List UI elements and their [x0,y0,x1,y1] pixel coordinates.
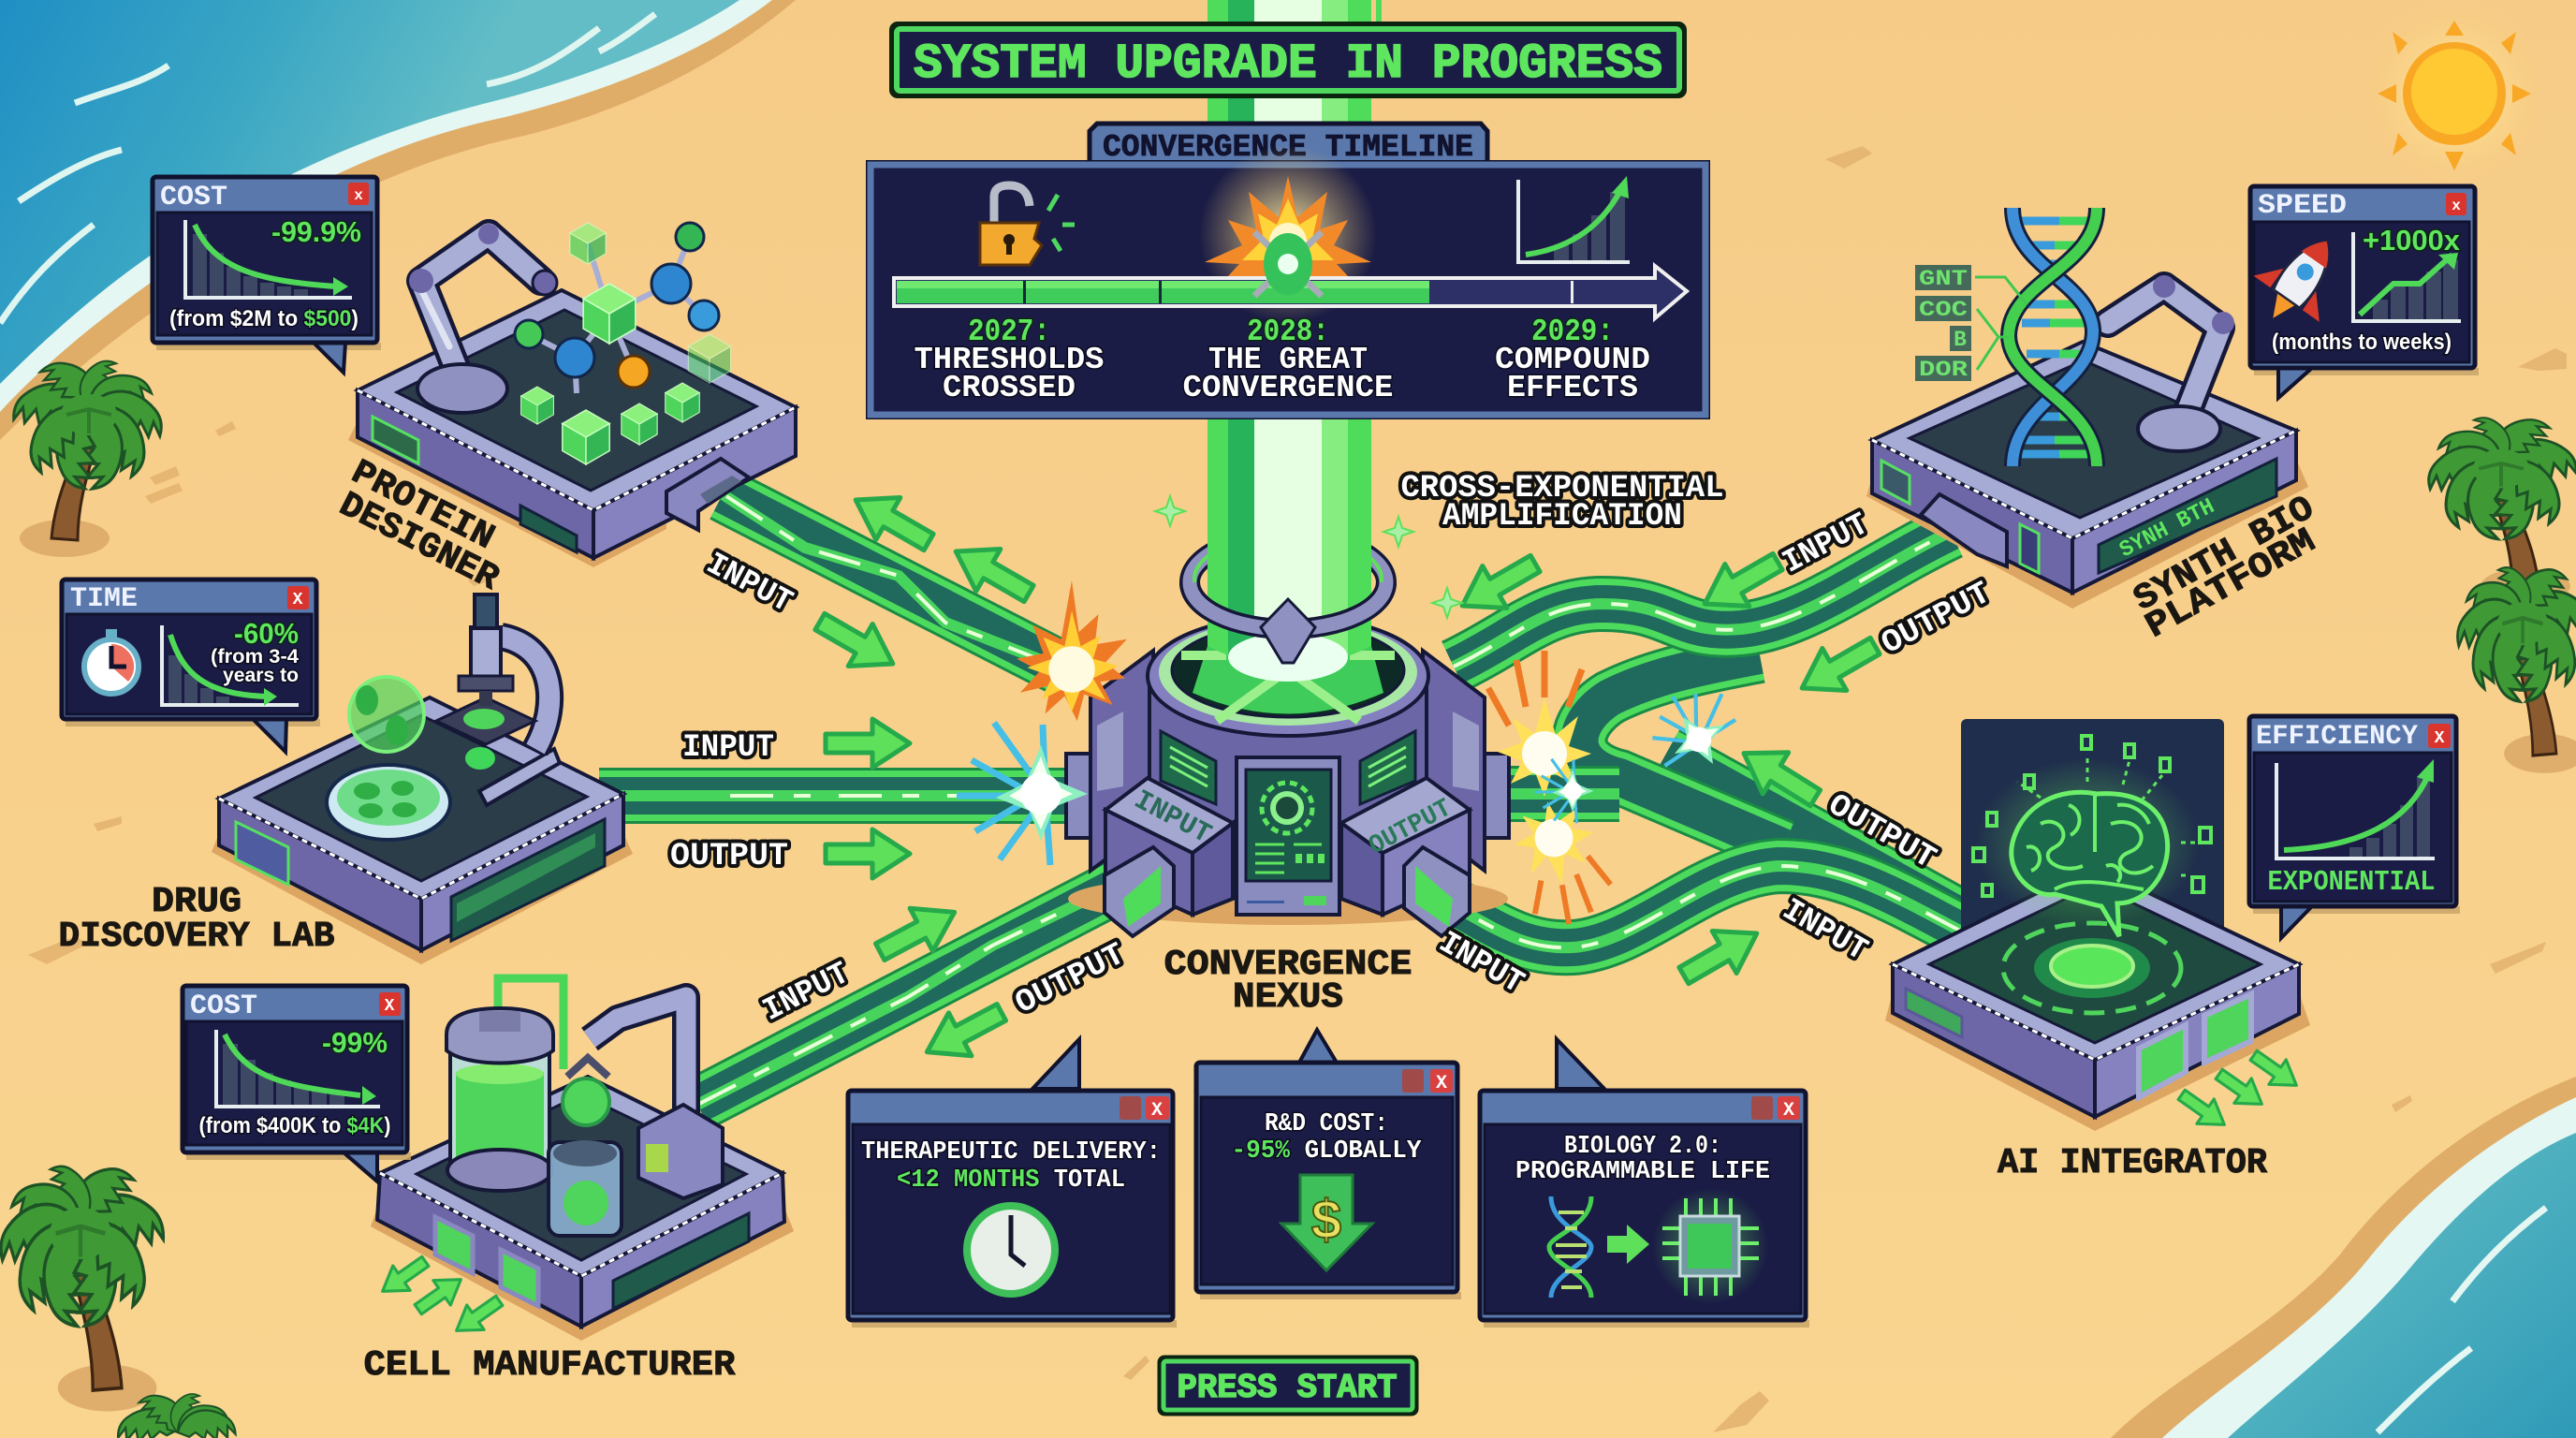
window: therapeutic delivery: <12 MONTHS TOTAL [897,1167,1125,1195]
window: biology 2.0: X [1783,1100,1794,1122]
callout: cost, protein designer: (from $2M to $500) [169,306,359,331]
callout: time, drug discovery lab: X [293,591,303,609]
collision burst: output lower [1508,794,1616,931]
milestone 2028: 2028: [1247,315,1329,349]
tube labels: INPUT [1776,893,1873,969]
beam sparkles [1155,496,1462,618]
nexus front: ring, monitor, input and output blocks: OUTPUT [1365,794,1456,861]
milestone 2028 [1183,315,1393,405]
label: convergence nexus: NEXUS [1233,977,1343,1018]
window: biology 2.0: PROGRAMMABLE LIFE [1515,1158,1770,1186]
icon: compound growth chart [1518,176,1630,262]
nexus front: ring, monitor, input and output blocks [1105,582,1470,936]
platform: drug discovery lab [212,594,633,964]
icon: rocket [2240,218,2360,341]
green flow arrows [373,478,2305,1343]
progress bar [894,232,1687,318]
platform: synth bio: DOR [1919,358,1968,382]
icon: unlocked padlock [980,185,1075,265]
icon: DNA helix [1549,1196,1591,1298]
platform: synth bio: SYNH BTH [2115,494,2219,564]
callout: cost, cell manufacturer [183,986,411,1181]
tube labels: OUTPUT [1822,788,1941,877]
timeline tab: CONVERGENCE TIMELINE [1103,130,1473,165]
milestone 2027: THRESHOLDS [914,343,1105,377]
collision burst: protein tube [1017,580,1127,721]
tube labels: OUTPUT [670,839,788,874]
panel: convergence timeline [866,124,1710,419]
milestone 2027: 2027: [968,315,1050,349]
tube labels: INPUT [1432,926,1530,1002]
callout: speed, synth bio: SPEED [2258,190,2347,222]
callout: cost, protein designer: COST [160,182,227,213]
icon: stopwatch [84,629,139,694]
platform: synth bio: GNT [1919,267,1968,291]
callout: efficiency, AI integrator [2249,716,2460,938]
window: biology 2.0: BIOLOGY 2.0: [1564,1133,1721,1161]
tube: nexus output stub [1507,766,1619,822]
milestone 2029: 2029: [1531,315,1614,349]
callout: cost, protein designer: -99.9% [271,215,361,248]
icon: clock [967,1206,1055,1294]
window: therapeutic delivery [848,1039,1177,1328]
ocean: bottom-right [2111,1077,2576,1438]
palm tree: lower left [0,1152,164,1412]
milestone 2028: CONVERGENCE [1183,371,1393,405]
collision burst: output crossing [1488,651,1591,797]
tube: protein designer to nexus [723,494,1058,667]
ocean: top-left [0,0,796,440]
icon: falling dollar arrow: $ [1310,1194,1342,1255]
tube: AI integrator to nexus [1423,866,1970,947]
tube: synth bio output branch [1580,655,1783,847]
platform: synth bio [1866,208,2308,609]
window: R&D cost: -95% GLOBALLY [1232,1137,1422,1166]
tube labels: OUTPUT [1010,937,1132,1022]
label: drug discovery lab: DISCOVERY LAB [58,917,335,957]
collision burst: right spark [1637,674,1749,785]
icon: convergence explosion [1199,145,1377,323]
label: cross-exponential amplification [1400,471,1724,535]
nexus front: ring, monitor, input and output blocks: INPUT [1128,785,1216,851]
label: cross-exponential amplification: CROSS-EXPONENTIAL [1400,471,1724,506]
arrow: DNA to chip [1607,1225,1649,1264]
callout: speed, synth bio [2240,186,2479,398]
collision burst: blue crossing [1535,759,1593,823]
callout: cost, cell manufacturer: -99% [322,1026,388,1059]
callout: efficiency, AI integrator: EXPONENTIAL [2267,866,2436,899]
tube: cell manufacturer to nexus [697,866,1156,1105]
platform: cell manufacturer [371,978,794,1341]
callout: time, drug discovery lab: (from 3-4 [211,646,299,668]
callout: efficiency, AI integrator: EFFICIENCY [2256,721,2418,753]
palm tree: bottom edge crown [117,1386,236,1438]
window: R&D cost [1196,1030,1461,1299]
icon: falling dollar arrow [1281,1175,1372,1270]
callout: cost, cell manufacturer: (from $400K to $4K) [198,1113,390,1138]
label: cross-exponential amplification: AMPLIFICATION [1442,499,1682,535]
label: cell manufacturer: CELL MANUFACTURER [363,1345,736,1386]
window: therapeutic delivery: THERAPEUTIC DELIVERY: [861,1138,1161,1167]
central energy beam [1198,0,1382,682]
milestone 2027 [914,315,1105,405]
window: R&D cost: X [1436,1073,1447,1094]
convergence nexus base [1066,536,1509,925]
label: synth bio platform: PLATFORM [2139,521,2322,647]
label: convergence nexus: CONVERGENCE [1164,945,1412,985]
window: R&D cost: R&D COST: [1265,1110,1388,1138]
window: biology 2.0 [1480,1039,1809,1328]
energy tubes [599,494,1970,1105]
tube labels: OUTPUT [1876,576,1997,663]
icon: biochip [1652,1188,1768,1304]
label: protein designer: DESIGNER [332,485,505,599]
sun [2361,0,2548,187]
tube labels [670,507,1997,1030]
callout: speed, synth bio: +1000x [2363,224,2461,257]
milestone 2028: THE GREAT [1208,343,1368,377]
palm tree: upper left [13,350,164,557]
callout: time, drug discovery lab: -60% [234,617,299,650]
press start button [1160,1357,1416,1414]
label: drug discovery lab: DRUG [152,882,242,922]
tube labels: INPUT [758,956,856,1030]
tube labels: INPUT [682,730,774,766]
timeline body [866,160,1710,419]
tube: AI integrator wide output [1666,754,1970,922]
callout: cost, protein designer [153,177,381,373]
callout: time, drug discovery lab: TIME [70,583,138,615]
tube: drug discovery lab to nexus [599,768,1076,824]
tube: synth bio platform to nexus [1454,532,1951,667]
milestone 2029: EFFECTS [1507,371,1638,405]
callout: speed, synth bio: (months to weeks) [2272,330,2452,355]
callout: speed, synth bio: x [2452,198,2461,214]
callout: cost, protein designer: x [354,187,363,204]
platform: AI integrator [1885,719,2310,1131]
milestone 2027: CROSSED [943,371,1076,405]
milestone 2029 [1495,315,1650,405]
palm tree: upper right [2426,407,2576,604]
callout: cost, cell manufacturer: X [385,997,395,1016]
window: therapeutic delivery: X [1151,1100,1163,1122]
press start button: PRESS START [1178,1369,1397,1407]
title banner: SYSTEM UPGRADE IN PROGRESS [914,37,1662,92]
callout: time, drug discovery lab: years to [223,665,299,686]
collision burst: drug tube [957,723,1088,865]
milestone 2029: COMPOUND [1495,343,1650,377]
label: AI integrator: AI INTEGRATOR [1998,1143,2267,1183]
label: protein designer: PROTEIN [344,453,501,559]
platform: protein designer [348,223,796,567]
label: synth bio platform: SYNTH BIO [2128,489,2321,621]
callout: cost, cell manufacturer: COST [190,990,257,1022]
platform: synth bio: B [1954,328,1967,352]
label: drug discovery lab [58,882,335,957]
platform: synth bio: COC [1919,298,1968,322]
label: convergence nexus [1164,945,1412,1018]
tube labels: INPUT [1778,507,1875,581]
callout: efficiency, AI integrator: X [2435,729,2445,748]
palm tree: lower right [2455,556,2576,773]
callout: time, drug discovery lab [62,580,320,752]
tube labels: INPUT [700,547,798,622]
